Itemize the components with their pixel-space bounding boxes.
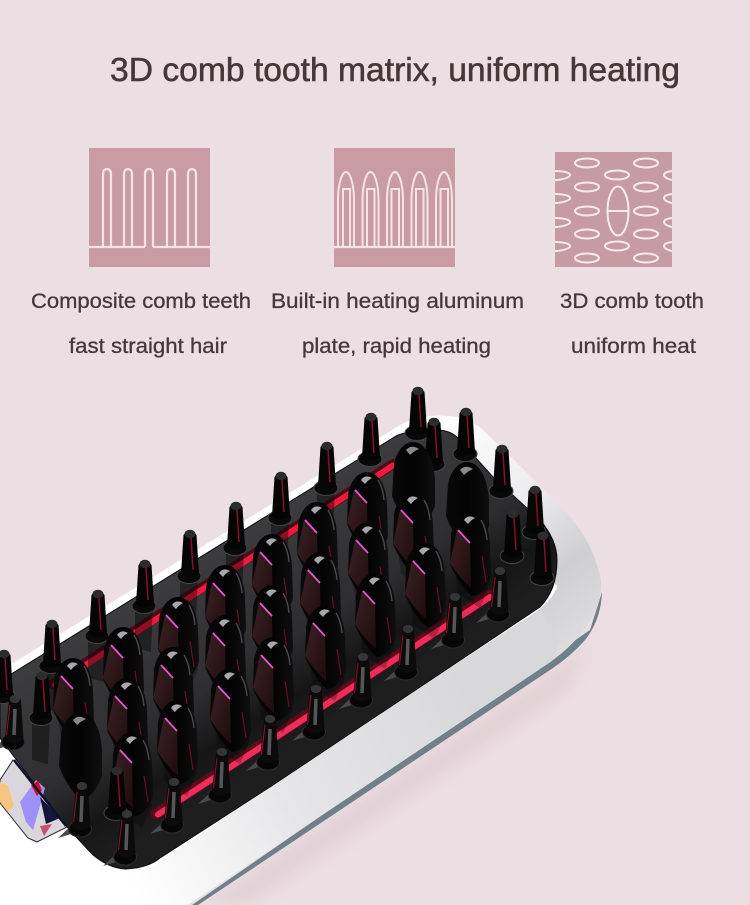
hair straightener brush <box>0 387 602 905</box>
icon: straight comb teeth <box>89 148 210 267</box>
upper red heating slot <box>53 464 393 684</box>
panel: built-in heating aluminum plate <box>271 148 524 358</box>
panel: 3D comb tooth <box>555 152 704 358</box>
transparent control button <box>0 760 67 842</box>
peg shadows on plate <box>32 486 335 764</box>
brush underside <box>192 592 602 905</box>
black comb plate <box>0 430 557 869</box>
label: 3D comb tooth: 3D comb tooth <box>560 290 704 313</box>
label: fast straight hair: fast straight hair <box>69 335 227 358</box>
brush front face shading <box>0 608 560 905</box>
brush white body <box>0 416 601 905</box>
panel: composite comb teeth <box>31 148 251 358</box>
comb teeth matrix <box>53 442 491 828</box>
icon: 3D tooth matrix <box>555 152 672 267</box>
title: 3D comb tooth matrix, uniform heating <box>110 51 680 88</box>
label: composite comb teeth: Composite comb teeth <box>31 290 251 313</box>
lower red heating slot <box>156 595 490 814</box>
label: plate, rapid heating: plate, rapid heating <box>302 335 491 358</box>
white rim along plate <box>150 585 556 866</box>
front row pegs <box>58 567 510 866</box>
label: uniform heat: uniform heat <box>571 335 696 358</box>
icon: teeth with inner aluminum plate <box>334 148 455 267</box>
soft drop shadow <box>200 610 600 905</box>
back row pegs <box>0 387 554 751</box>
label: built-in heating aluminum: Built-in heating aluminum <box>271 290 524 313</box>
